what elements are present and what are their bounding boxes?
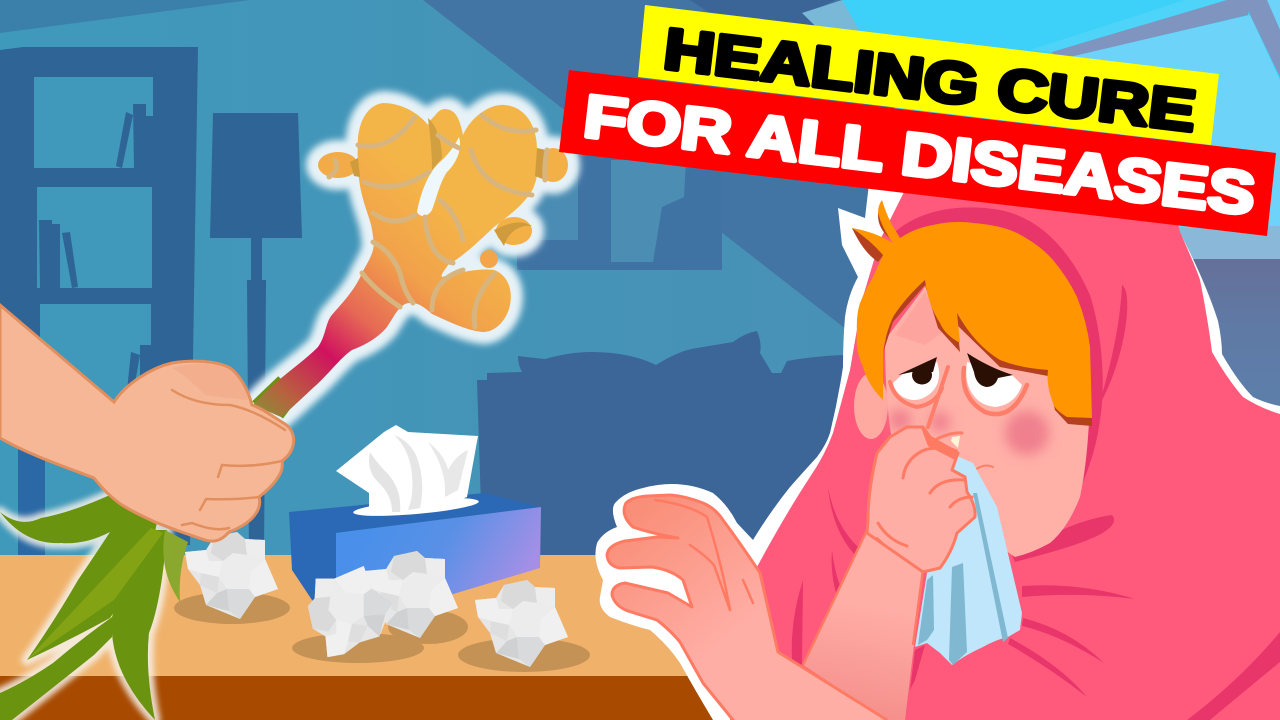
- forehead flush: [895, 292, 945, 345]
- ceiling shadow top left: [0, 0, 250, 33]
- shelf leg: [18, 450, 45, 556]
- red banner: [559, 70, 1276, 236]
- light streak leaf: [27, 528, 163, 660]
- left hand holding ginger: [0, 305, 294, 541]
- table front: [0, 676, 820, 720]
- finger creases: [172, 390, 285, 529]
- glow halo: [253, 103, 568, 417]
- tissue sheet: [336, 425, 478, 515]
- face: [885, 280, 1090, 557]
- ginger body: [253, 103, 538, 417]
- box slot: [353, 495, 479, 519]
- right eye: [963, 353, 1027, 414]
- sill pane: [1170, 226, 1280, 262]
- window reflection pane: [802, 0, 885, 75]
- bed silhouette: [477, 331, 870, 600]
- white streak gap: [417, 137, 460, 216]
- box front: [336, 507, 541, 620]
- sky: [842, 0, 1280, 232]
- mouth: [975, 466, 993, 470]
- heading line one: HEALING CURE: [660, 16, 1199, 144]
- shadowed wall right: [423, 0, 1280, 720]
- pink blanket hood: [730, 190, 1280, 720]
- darker lobe: [428, 118, 442, 170]
- table top: [0, 555, 820, 677]
- pale leaf: [163, 530, 188, 602]
- cheek blush: [889, 409, 1049, 455]
- top corner sky: [1267, 0, 1280, 30]
- forearm: [803, 530, 923, 720]
- hood inner band: [895, 207, 1103, 490]
- right pane: [611, 160, 686, 262]
- box top and side: [289, 493, 541, 606]
- hair: [852, 200, 1092, 418]
- blanket fold marks: [792, 487, 1280, 720]
- ball front: [308, 566, 393, 657]
- left nub: [318, 152, 358, 178]
- tooth: [951, 436, 960, 448]
- middle lobe shade: [430, 109, 460, 161]
- tissue box: [289, 425, 541, 620]
- floor lamp silhouette: [210, 113, 302, 555]
- main leaf: [27, 505, 160, 660]
- sick person: [595, 175, 1280, 720]
- left leaf: [0, 488, 130, 543]
- finger lines: [877, 448, 972, 547]
- ball middle: [365, 551, 458, 638]
- small lower nub: [496, 217, 532, 245]
- bookshelf silhouette: [0, 47, 198, 556]
- leaves: [0, 488, 188, 720]
- forearm outline: [803, 530, 923, 665]
- left pane: [517, 148, 578, 240]
- hair shadow: [883, 260, 1092, 426]
- lower right leaf: [112, 530, 167, 720]
- right nub: [538, 148, 568, 182]
- raised hand: [607, 495, 887, 720]
- ear: [854, 373, 888, 439]
- fist: [867, 425, 975, 572]
- knuckle highlight: [172, 364, 248, 400]
- crumpled tissue balls: [185, 532, 568, 667]
- heading line two: FOR ALL DISEASES: [580, 82, 1259, 228]
- hood fold line: [1098, 285, 1127, 408]
- left eye: [890, 357, 942, 407]
- ball back left: [185, 532, 278, 619]
- yellow banner: [638, 5, 1219, 145]
- title banner: [559, 5, 1276, 236]
- table: [0, 555, 820, 720]
- white sticker outline: [595, 175, 1280, 720]
- pinched knuckle: [920, 425, 958, 460]
- window frame top bar: [1052, 0, 1250, 60]
- blue handkerchief: [915, 455, 1022, 665]
- dark ceiling: [690, 0, 850, 60]
- nub knob: [480, 250, 498, 268]
- nose line: [928, 367, 948, 427]
- lower wall: [1190, 259, 1280, 429]
- lower left leaf: [0, 617, 112, 720]
- leaf halo: [0, 488, 167, 720]
- hand tendon lines: [655, 500, 753, 610]
- ball right: [475, 580, 568, 667]
- light sky pane: [1055, 15, 1280, 232]
- books: [39, 104, 153, 400]
- ginger root with glow: [253, 103, 568, 417]
- window: [802, 0, 1280, 429]
- tissue shadows: [174, 592, 590, 672]
- sky reflection strip: [1030, 0, 1227, 52]
- ginger rings: [329, 115, 547, 327]
- cover palm base: [720, 656, 884, 720]
- picture frame silhouette: [517, 148, 722, 270]
- stem green edges: [254, 378, 305, 417]
- window frame side bar: [1243, 0, 1280, 77]
